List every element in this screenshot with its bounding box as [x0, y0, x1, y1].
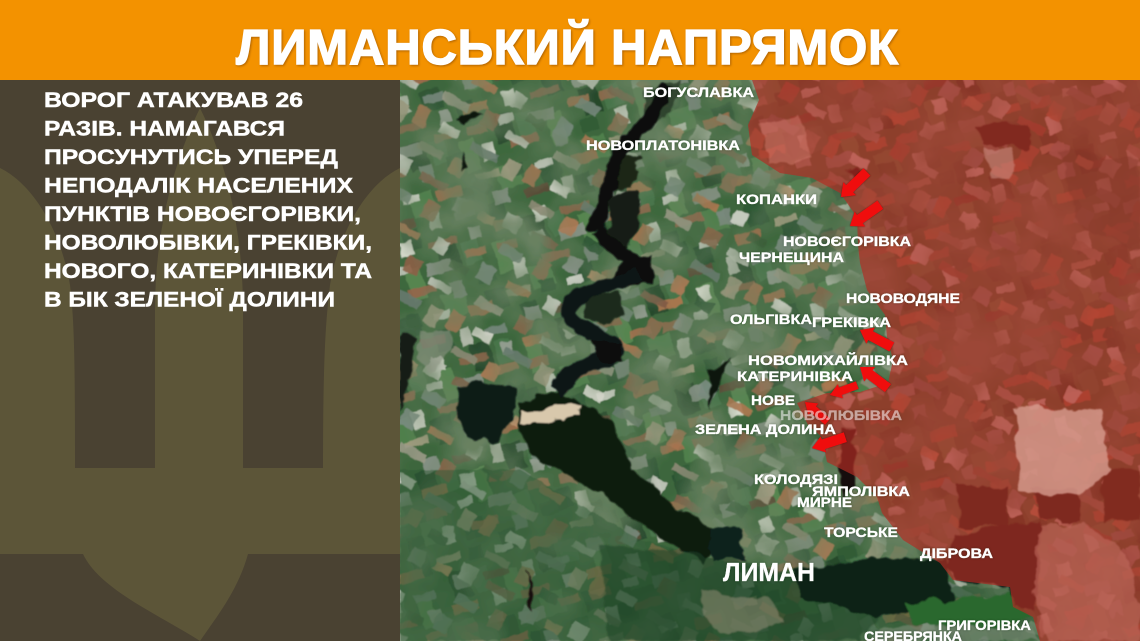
settlement labels: ДІБРОВА: [920, 545, 993, 561]
settlement labels: НОВОЄГОРІВКА: [783, 233, 911, 249]
settlement labels: НОВОВОДЯНЕ: [846, 290, 960, 306]
map panel: [400, 80, 1140, 641]
settlement labels: ГРЕКІВКА: [812, 314, 891, 330]
header band: [0, 0, 1140, 80]
panel body text: ПУНКТІВ НОВОЄГОРІВКИ,: [44, 202, 361, 226]
settlement labels: НОВОПЛАТОНІВКА: [586, 137, 740, 153]
settlement labels: НОВОЛЮБІВКА: [780, 407, 902, 423]
panel body text: РАЗІВ. НАМАГАВСЯ: [44, 116, 285, 140]
arrow to Novoiehorivka: [845, 197, 885, 233]
arrow to Zelena Dolyna: [809, 429, 848, 456]
satellite terrain: [390, 70, 1140, 641]
attack arrows: [800, 166, 896, 456]
settlement labels: КОЛОДЯЗІ: [754, 471, 838, 487]
panel body text: НОВОГО, КАТЕРИНІВКИ ТА: [44, 259, 372, 283]
title: ЛИМАНСЬКИЙ НАПРЯМОК: [236, 20, 898, 75]
settlement labels: ЗЕЛЕНА ДОЛИНА: [695, 421, 836, 437]
trident emblem: [0, 108, 400, 641]
arrow to Kopanky: [835, 166, 873, 203]
panel body text: НОВОЛЮБІВКИ, ГРЕКІВКИ,: [44, 230, 372, 254]
settlement labels: НОВЕ: [751, 392, 795, 408]
arrow to Hrekivka: [856, 322, 896, 355]
settlement labels: КАТЕРИНІВКА: [737, 368, 853, 384]
left text panel: [0, 88, 400, 641]
settlement labels: ГРИГОРІВКА: [938, 617, 1031, 633]
panel body text: НЕПОДАЛІК НАСЕЛЕНИХ: [44, 174, 354, 198]
occupied territory overlay: [740, 80, 1140, 641]
settlement labels: ЛИМАН: [723, 557, 815, 587]
panel body text: В БІК ЗЕЛЕНОЇ ДОЛИНИ: [44, 288, 335, 312]
settlement labels: БОГУСЛАВКА: [643, 84, 754, 100]
settlement labels: ОЛЬГІВКА: [730, 311, 812, 327]
settlement labels: ЧЕРНЕЩИНА: [739, 249, 844, 265]
forests and reservoir: [400, 80, 1140, 641]
panel body text: ВОРОГ АТАКУВАВ 26: [44, 88, 303, 112]
settlement labels: ТОРСЬКЕ: [824, 524, 898, 540]
panel body text: [44, 88, 372, 312]
arrow to Nove: [800, 396, 833, 427]
arrow to Katerynivka: [827, 378, 860, 402]
settlement labels: МИРНЕ: [797, 494, 852, 510]
arrow to Novomykhailivka: [855, 360, 893, 395]
settlement labels: НОВОМИХАЙЛІВКА: [748, 351, 908, 368]
light sandy patches in occupied area: [760, 118, 1140, 641]
settlement labels: [586, 84, 1031, 641]
settlement labels: ЯМПОЛІВКА: [812, 483, 910, 499]
panel body text: ПРОСУНУТИСЬ УПЕРЕД: [44, 145, 338, 169]
settlement labels: КОПАНКИ: [736, 191, 817, 207]
